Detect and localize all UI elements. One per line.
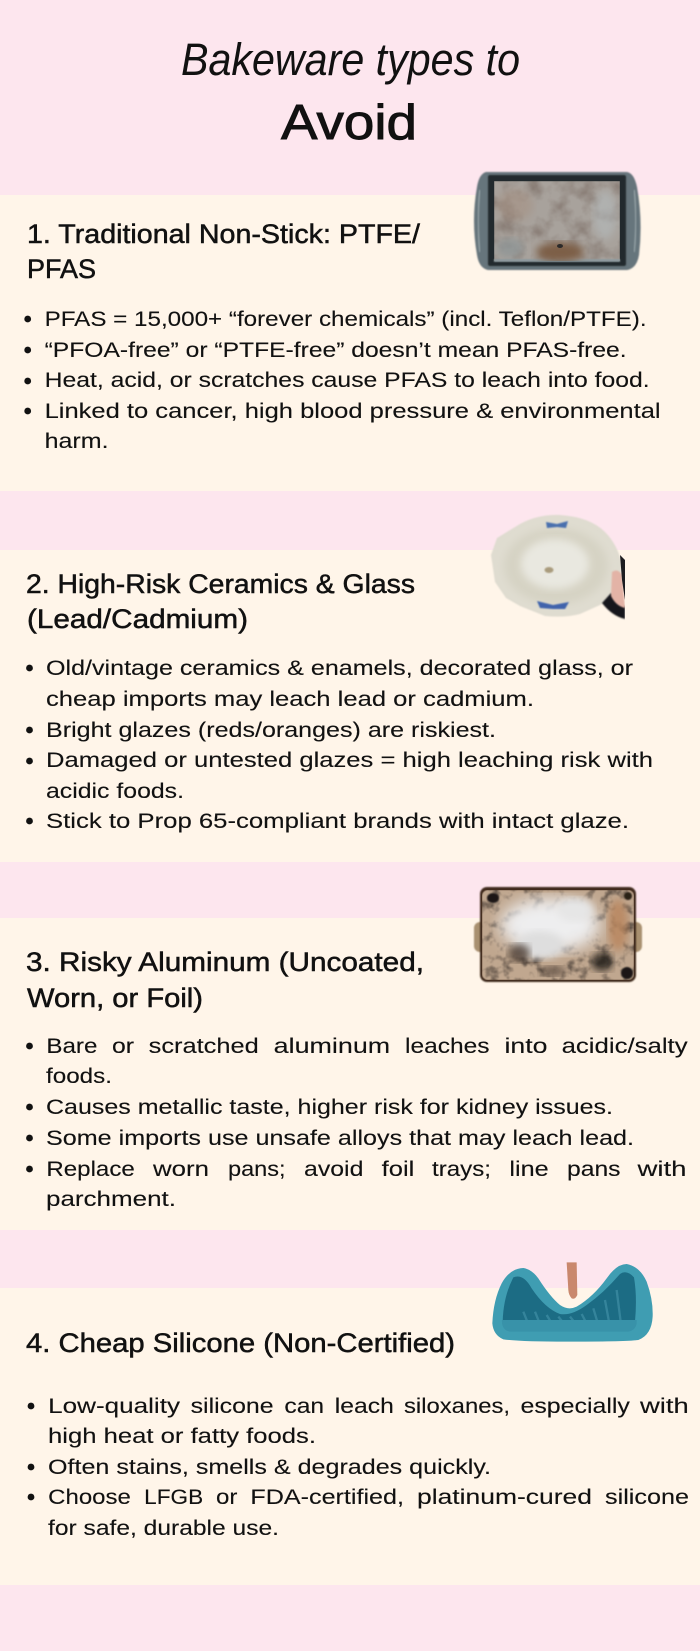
title: Bakeware types to (181, 34, 520, 85)
bullet list: section 3: parchment. (46, 1187, 176, 1211)
bullet list: section 2: Stick to Prop 65-compliant brands with intact glaze. (46, 809, 629, 833)
bullet list: section 4: silicone (605, 1485, 689, 1509)
bullet list: section 1 (24, 307, 661, 453)
icon: worn non-stick baking pan (474, 172, 641, 270)
bullet list: section 3: scratched (149, 1034, 259, 1058)
bullet list: section 4: Choose (48, 1485, 131, 1509)
bullet list: section 2: Damaged or untested glazes = high leaching risk with (46, 748, 653, 772)
heading: section 2 (26, 569, 415, 634)
bullet list: section 3: foil (382, 1157, 414, 1181)
bullet list: section 4: platinum-cured (417, 1485, 592, 1509)
bullet list: section 2: acidic foods. (46, 779, 184, 803)
bullet list: section 4: siloxanes, (404, 1394, 510, 1418)
bullet list: section 4 (28, 1394, 689, 1540)
bullet list: section 3: acidic/salty (562, 1034, 688, 1058)
bullet list: section 3: foods. (46, 1064, 112, 1088)
bullet list: section 1: “PFOA-free” or “PTFE-free” doesn’t mean PFAS-free. (45, 338, 627, 362)
bullet list: section 2: Old/vintage ceramics & enamels, decorated glass, or (46, 656, 633, 680)
panel: risky aluminum (0, 887, 700, 1230)
bullet list: section 4: with (639, 1394, 689, 1418)
bullet list: section 2 (26, 656, 653, 833)
panel: high-risk ceramics and glass (0, 515, 700, 862)
bullet list: section 3: aluminum (274, 1034, 390, 1058)
bullet list: section 3: or (112, 1034, 134, 1058)
heading: section 3: 3. Risky Aluminum (Uncoated, (26, 947, 424, 977)
heading: section 1: PFAS (27, 254, 96, 284)
bullet list: section 3: line (509, 1157, 549, 1181)
bullet list: section 3: Bare (46, 1034, 97, 1058)
bullet list: section 3: into (504, 1034, 548, 1058)
bullet list: section 4: especially (520, 1394, 630, 1418)
bullet list: section 3: leaches (405, 1034, 490, 1058)
bullet list: section 4: or (216, 1485, 237, 1509)
bullet list: section 4: Low-quality (48, 1394, 180, 1418)
bullet list: section 3: with (636, 1157, 686, 1181)
heading: section 3: Worn, or Foil) (27, 983, 203, 1013)
heading: section 1 (27, 219, 421, 284)
bullet list: section 3: trays; (432, 1157, 491, 1181)
bullet list: section 1: Heat, acid, or scratches cause PFAS to leach into food. (45, 368, 650, 392)
bullet list: section 4: LFGB (144, 1485, 203, 1509)
bullet list: section 4: can (284, 1394, 324, 1418)
bullet list: section 3: worn (152, 1157, 209, 1181)
bullet list: section 3: Some imports use unsafe alloys that may leach lead. (46, 1126, 634, 1150)
icon: worn aluminum tray (474, 887, 642, 982)
bullet list: section 3: Causes metallic taste, higher risk for kidney issues. (46, 1095, 613, 1119)
icon: teal silicone loaf mold (492, 1262, 653, 1342)
bullet list: section 3: avoid (304, 1157, 363, 1181)
title: Avoid (281, 96, 417, 150)
heading: section 3 (26, 947, 424, 1013)
heading: section 4: 4. Cheap Silicone (Non-Certified) (26, 1328, 455, 1358)
bullet list: section 2: cheap imports may leach lead or cadmium. (46, 687, 534, 711)
heading: section 1: 1. Traditional Non-Stick: PTFE/ (27, 219, 421, 249)
bullet list: section 4: Often stains, smells & degrades quickly. (48, 1455, 491, 1479)
bullet list: section 4: silicone (191, 1394, 274, 1418)
bullet list: section 2: Bright glazes (reds/oranges) are riskiest. (46, 718, 496, 742)
bullet list: section 3: pans (567, 1157, 620, 1181)
bullet list: section 1: harm. (45, 429, 109, 453)
bullet list: section 4: FDA-certified, (250, 1485, 404, 1509)
bullet list: section 4: leach (335, 1394, 394, 1418)
panel: traditional non-stick (0, 172, 700, 491)
icon: vintage ceramic plate (491, 515, 625, 619)
bullet list: section 3: Replace (46, 1157, 135, 1181)
bullet list: section 1: PFAS = 15,000+ “forever chemicals” (incl. Teflon/PTFE). (45, 307, 647, 331)
bullet list: section 3: pans; (228, 1157, 286, 1181)
bullet list: section 1: Linked to cancer, high blood pressure & environmental (45, 399, 661, 423)
bullet list: section 3 (26, 1034, 688, 1211)
heading: section 2: (Lead/Cadmium) (27, 604, 248, 634)
bullet list: section 4: for safe, durable use. (48, 1516, 279, 1540)
title (181, 34, 520, 150)
bullet list: section 4: high heat or fatty foods. (48, 1424, 316, 1448)
panel: cheap silicone (0, 1262, 700, 1585)
heading: section 2: 2. High-Risk Ceramics & Glass (26, 569, 415, 599)
